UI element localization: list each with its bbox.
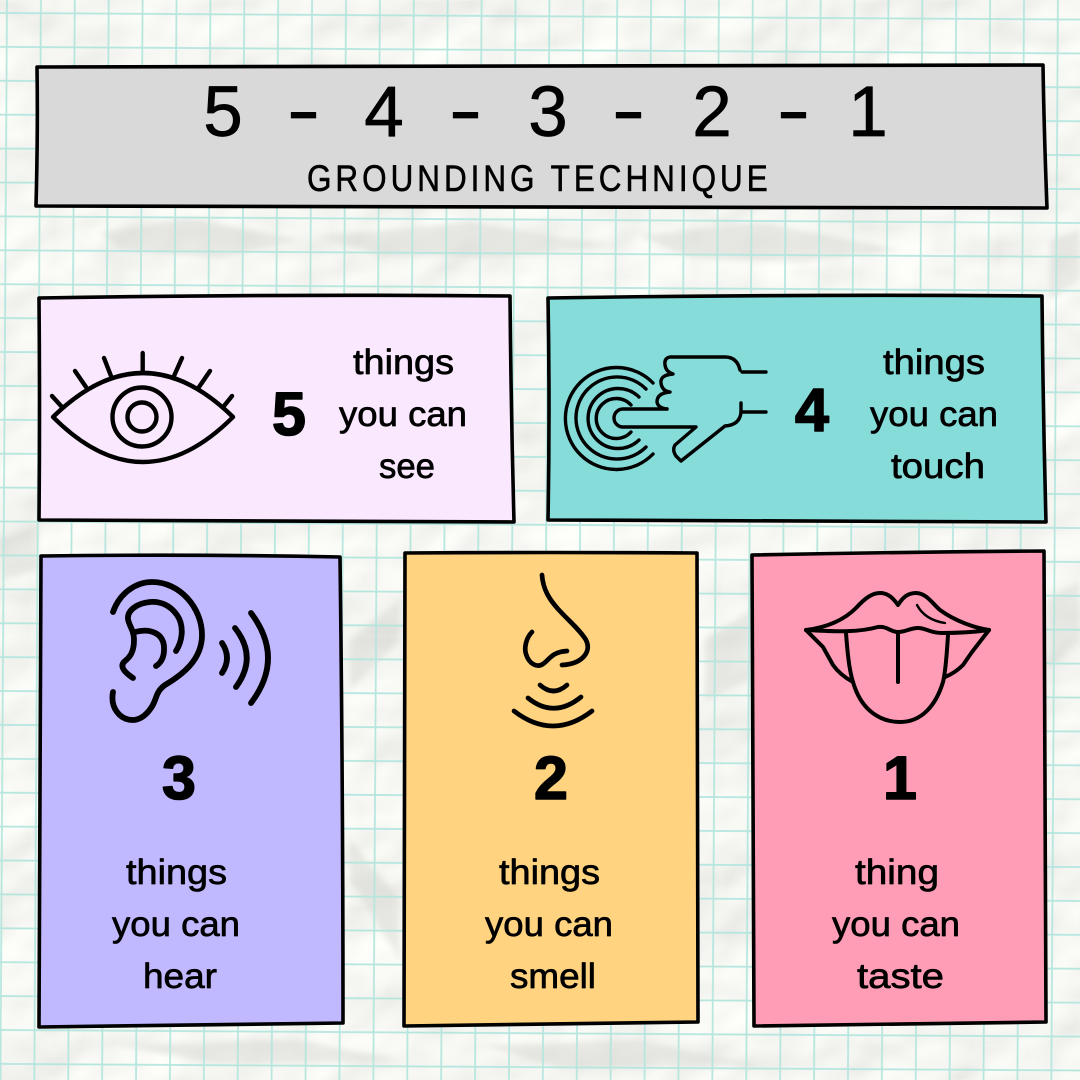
- text: thing you can taste: taste: [857, 957, 944, 996]
- icon: mouth and tongue: [806, 593, 989, 722]
- panel: touch: [548, 295, 1046, 522]
- panel: hear: [39, 555, 343, 1027]
- subtitle: GROUNDING TECHNIQUE: [307, 159, 768, 200]
- text: things you can hear: [112, 853, 240, 996]
- title numbers 5-4-3-2-1: -: [612, 71, 645, 150]
- icon: ear: [112, 582, 268, 720]
- icon: eye: [52, 353, 233, 462]
- text: thing you can taste: you can: [832, 905, 960, 944]
- title numbers 5-4-3-2-1: -: [449, 71, 482, 150]
- title numbers 5-4-3-2-1: -: [287, 71, 320, 150]
- text: things you can touch: things: [883, 343, 985, 382]
- text: things you can smell: [485, 853, 613, 996]
- panel: taste: [752, 551, 1046, 1026]
- number 4: 4: [795, 376, 829, 444]
- text: things you can hear: you can: [112, 905, 240, 944]
- title numbers 5-4-3-2-1: -: [777, 71, 810, 150]
- panel: see: [39, 295, 514, 522]
- text: things you can hear: things: [126, 853, 227, 892]
- text: things you can smell: you can: [485, 905, 613, 944]
- number 3: 3: [162, 744, 196, 812]
- text: things you can see: things: [353, 343, 454, 382]
- title numbers 5-4-3-2-1: 5: [203, 73, 243, 152]
- icon: finger touching: [565, 357, 766, 470]
- number 1: 1: [883, 744, 917, 812]
- text: things you can see: [339, 343, 467, 486]
- title numbers 5-4-3-2-1: 3: [528, 73, 568, 152]
- number 5: 5: [272, 380, 306, 448]
- text: thing you can taste: thing: [855, 853, 939, 892]
- number 2: 2: [534, 744, 568, 812]
- text: thing you can taste: [832, 853, 960, 996]
- text: things you can smell: smell: [510, 957, 596, 996]
- text: things you can see: see: [379, 447, 435, 486]
- text: things you can touch: touch: [891, 447, 985, 486]
- title numbers 5-4-3-2-1: 2: [692, 73, 732, 152]
- title numbers 5-4-3-2-1: [203, 71, 888, 152]
- text: things you can touch: [870, 343, 998, 486]
- icon: nose: [514, 575, 592, 726]
- title panel: [36, 65, 1047, 208]
- text: things you can touch: you can: [870, 395, 998, 434]
- text: things you can smell: things: [499, 853, 600, 892]
- title numbers 5-4-3-2-1: 4: [364, 73, 404, 152]
- text: things you can see: you can: [339, 395, 467, 434]
- text: things you can hear: hear: [143, 957, 217, 996]
- title numbers 5-4-3-2-1: 1: [848, 73, 888, 152]
- panel: smell: [404, 552, 698, 1026]
